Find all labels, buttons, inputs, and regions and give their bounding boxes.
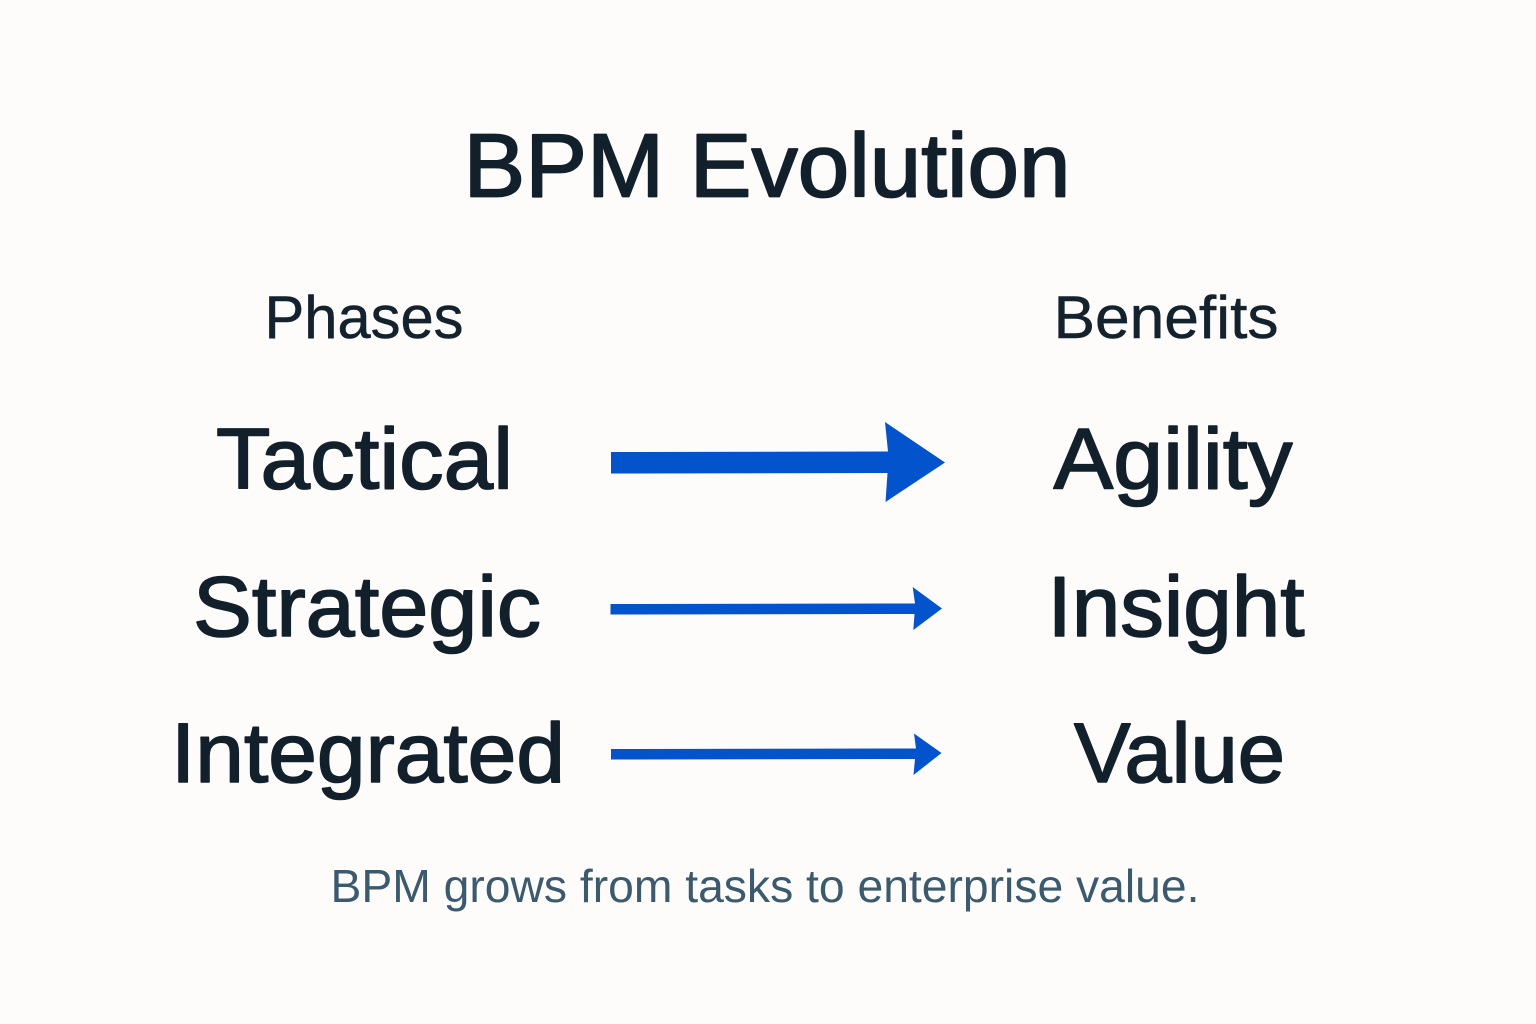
arrow: Integrated to Value: [611, 734, 942, 775]
phase: Integrated: Integrated: [171, 706, 565, 800]
benefit: Agility: Agility: [1054, 412, 1292, 508]
arrow: Strategic to Insight: [610, 587, 942, 630]
caption: BPM grows from tasks to enterprise value.: [330, 860, 1200, 912]
column heading: benefits: Benefits: [1054, 284, 1278, 351]
arrow: Tactical to Agility: [611, 422, 945, 502]
column heading: phases: Phases: [264, 284, 464, 351]
benefit: Insight: Insight: [1048, 560, 1304, 655]
title: BPM Evolution: [464, 116, 1070, 216]
phase: Strategic: Strategic: [193, 560, 541, 655]
phase: Tactical: Tactical: [216, 412, 513, 508]
benefit: Value: Value: [1074, 706, 1285, 800]
